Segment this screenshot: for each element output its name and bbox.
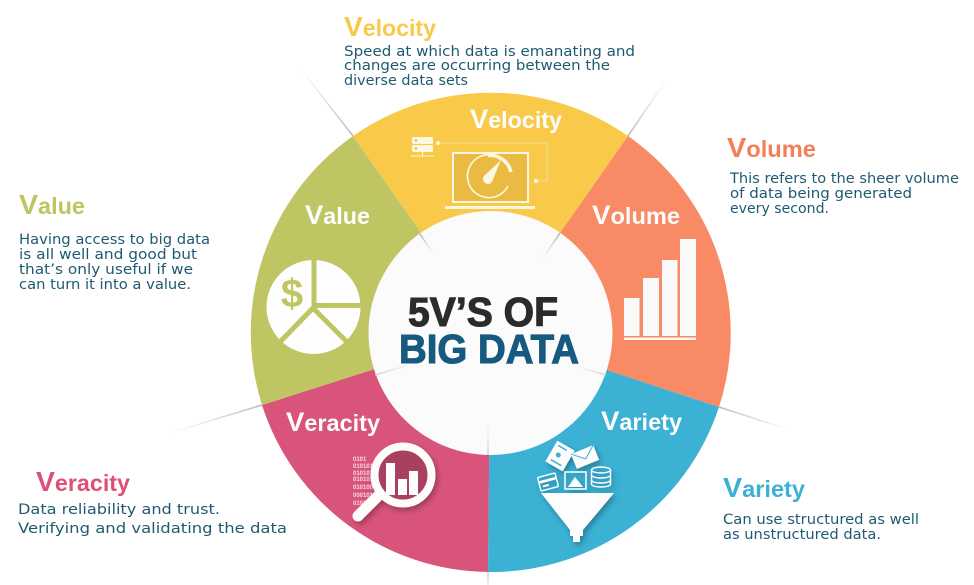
- segment label: Velocity: Velocity: [470, 104, 562, 134]
- inner divider lines: [375, 233, 606, 455]
- panel: variety description: [723, 472, 919, 543]
- icon: server and laptop gauge: [411, 137, 547, 209]
- body text: This refers to the sheer volume: [729, 171, 959, 187]
- binary digits: 01010101: [353, 464, 380, 470]
- segment: volume: [490, 136, 731, 407]
- binary digits: [353, 457, 380, 507]
- panel: velocity description: [344, 11, 635, 89]
- body text: as unstructured data.: [723, 527, 881, 543]
- segment label: Veracity: Veracity: [286, 407, 380, 437]
- body text: [729, 171, 959, 217]
- gauge: [467, 155, 510, 198]
- segment label: Volume: Volume: [592, 200, 680, 230]
- segment: variety: [488, 332, 719, 572]
- binary digits: 0101: [353, 457, 367, 463]
- body text: Speed at which data is emanating and: [344, 44, 635, 60]
- binary digits: 01010101: [353, 477, 380, 483]
- icon: magnifier with binary data: [353, 446, 432, 516]
- body text: is all well and good but: [19, 247, 197, 263]
- funnel: [541, 493, 614, 542]
- title line: 5V'S OF: 5V’S OF: [408, 289, 558, 335]
- body text: [19, 232, 210, 293]
- picture: [565, 472, 586, 489]
- body text: changes are occurring between the: [344, 58, 610, 74]
- body text: [344, 44, 635, 89]
- body text: Verifying and validating the data: [18, 521, 287, 537]
- segment label: Value: Value: [305, 200, 370, 230]
- panel: veracity description: [18, 466, 287, 537]
- panel: volume description: [727, 132, 959, 217]
- heading: Volume: [727, 132, 816, 163]
- binary digits: 000101: [353, 493, 374, 499]
- heading: Velocity: [344, 11, 436, 42]
- binary digits: 0101: [353, 501, 367, 507]
- center circle: [368, 211, 612, 455]
- dollar sign: $: [281, 272, 303, 316]
- center title: [399, 289, 579, 372]
- body text: can turn it into a value.: [19, 277, 191, 293]
- body text: every second.: [730, 201, 829, 217]
- body text: [723, 512, 919, 543]
- segment label: Variety: Variety: [601, 406, 682, 436]
- binary digits: 01010101: [353, 471, 380, 477]
- heading: Value: [19, 189, 85, 220]
- segment: veracity: [262, 332, 490, 572]
- body text: Data reliability and trust.: [18, 502, 220, 518]
- heading: Veracity: [36, 466, 130, 497]
- body text: Can use structured as well: [723, 512, 919, 528]
- laptop: [453, 153, 528, 202]
- server: [411, 137, 434, 156]
- document: [545, 441, 575, 471]
- icon: bar chart: [624, 239, 696, 340]
- body text: [18, 502, 287, 537]
- binary digits: 010100: [353, 485, 374, 491]
- icon: funnel with data types: [537, 441, 614, 542]
- body text: Having access to big data: [19, 232, 210, 248]
- donut wheel: [251, 93, 731, 572]
- segment: value: [251, 136, 490, 405]
- envelope: [571, 445, 599, 469]
- heading: Variety: [723, 472, 805, 503]
- panel: value description: [19, 189, 210, 293]
- database: [592, 467, 610, 487]
- radial divider lines: [170, 68, 790, 585]
- magnifying glass: [358, 446, 432, 516]
- icon: pie chart with dollar: [266, 258, 363, 354]
- body text: that’s only useful if we: [19, 262, 193, 278]
- segment: velocity: [353, 93, 628, 332]
- connector: [438, 143, 547, 181]
- body text: diverse data sets: [344, 73, 468, 89]
- title line: BIG DATA: BIG DATA: [399, 326, 579, 372]
- credit card: [537, 473, 559, 491]
- body text: of data being generated: [730, 186, 912, 202]
